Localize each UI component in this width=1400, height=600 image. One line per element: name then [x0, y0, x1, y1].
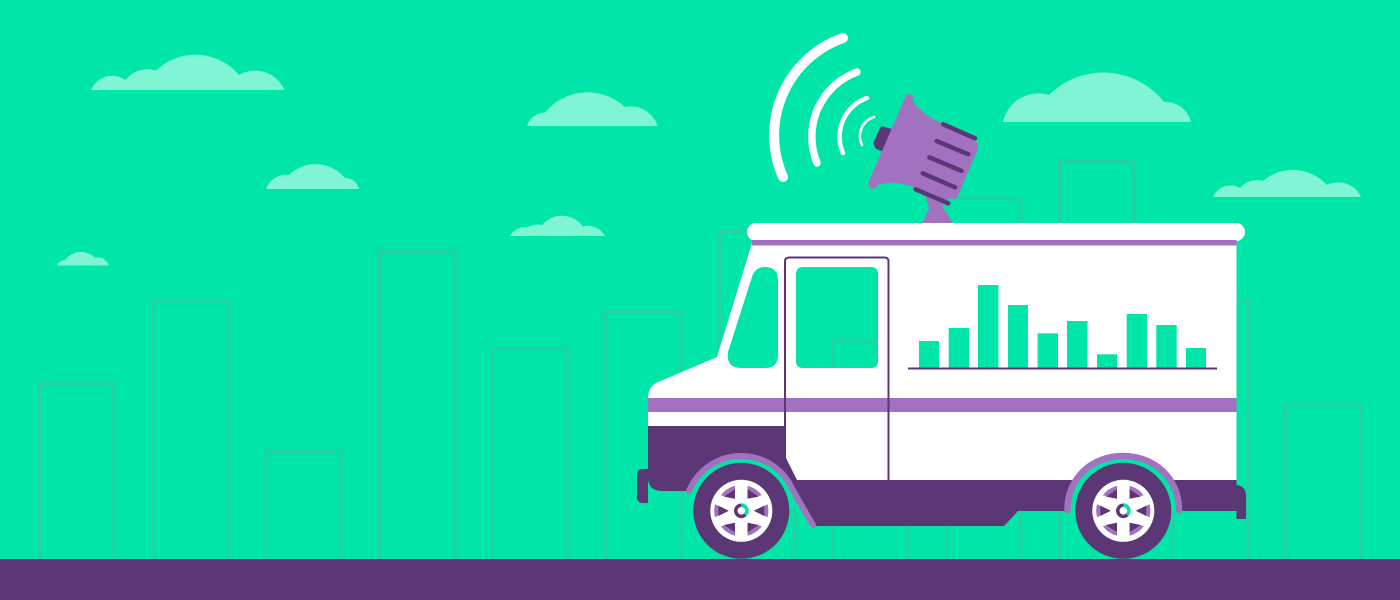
lower chassis	[648, 426, 1246, 526]
road	[0, 559, 1400, 600]
truck body	[648, 243, 1236, 482]
megaphone stripes	[916, 124, 975, 203]
front bumper	[637, 469, 648, 503]
megaphone	[868, 94, 978, 224]
front wheel arch trim	[689, 456, 813, 525]
front wheel	[693, 463, 789, 559]
door outline	[785, 258, 888, 480]
cloud 6	[266, 164, 359, 189]
roof	[747, 223, 1245, 241]
side stripe	[648, 398, 1236, 412]
cloud 7	[57, 252, 109, 266]
clouds	[57, 55, 1361, 265]
cloud 1	[91, 55, 284, 90]
cloud 5	[510, 216, 605, 236]
sound waves	[774, 38, 874, 177]
megaphone handle	[876, 128, 892, 150]
city skyline outlines	[40, 162, 1361, 559]
cloud 3	[1213, 170, 1361, 197]
cloud 2	[1003, 72, 1191, 122]
roof stripe	[752, 240, 1236, 246]
bar chart on truck side	[908, 285, 1217, 370]
megaphone horn	[868, 94, 978, 199]
cloud 4	[527, 92, 658, 126]
rear wheel arch trim	[1068, 456, 1179, 510]
megaphone stand	[922, 196, 953, 224]
rear wheel	[1075, 463, 1171, 559]
delivery truck	[637, 223, 1246, 559]
rear wheel arch opening	[1068, 456, 1179, 511]
